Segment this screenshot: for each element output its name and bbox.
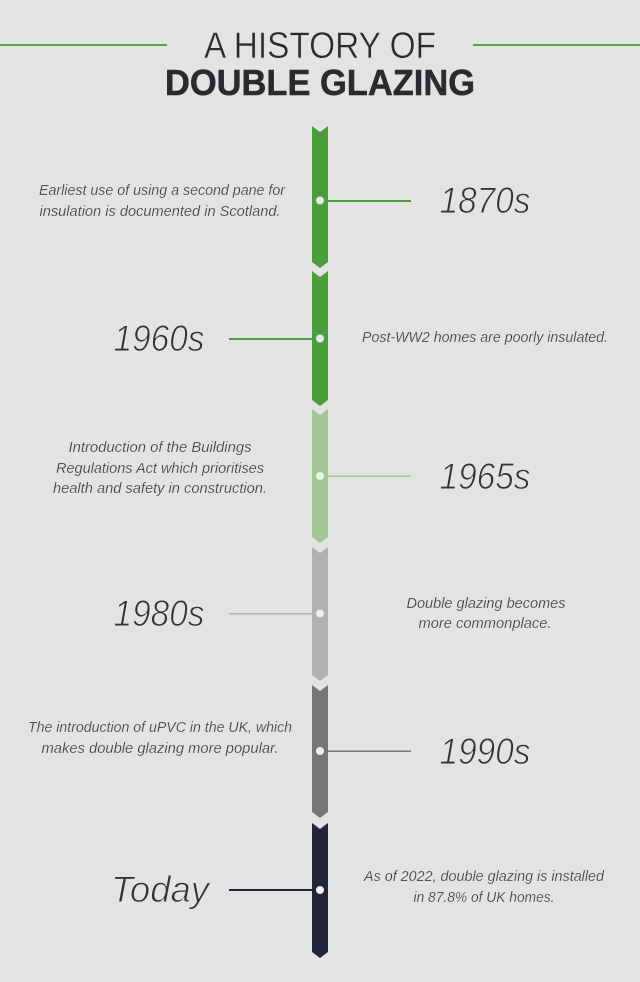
year 1965s: 1965s [440, 456, 530, 497]
description 1990s [28, 720, 292, 757]
year today: Today [111, 869, 211, 910]
segment 1960s [229, 271, 328, 406]
description 1980s: Double glazing becomes [406, 596, 566, 612]
timeline [229, 126, 411, 958]
title line 2: DOUBLE GLAZING [165, 62, 475, 103]
description 1980s: more commonplace. [418, 616, 552, 632]
year 1960s: 1960s [114, 318, 204, 359]
segment 1990s [312, 685, 411, 818]
segment 1870s [312, 126, 411, 268]
description today: As of 2022, double glazing is installed [363, 869, 605, 885]
description today: in 87.8% of UK homes. [414, 890, 554, 906]
description 1870s: Earliest use of using a second pane for [39, 183, 286, 199]
description 1965s [53, 440, 267, 497]
year 1980s: 1980s [114, 593, 204, 634]
description 1990s: The introduction of uPVC in the UK, which [28, 720, 292, 736]
left title rule [0, 44, 167, 46]
description 1965s: health and safety in construction. [53, 481, 267, 497]
description 1960s: Post-WW2 homes are poorly insulated. [362, 330, 608, 346]
title line 1: A HISTORY OF [204, 25, 436, 66]
description 1990s: makes double glazing more popular. [42, 741, 278, 757]
description 1965s: Introduction of the Buildings [68, 440, 252, 456]
right title rule [473, 44, 640, 46]
description today [363, 869, 605, 906]
description 1980s [406, 596, 566, 632]
description 1870s: insulation is documented in Scotland. [40, 204, 280, 220]
segment 1965s [312, 409, 411, 543]
segment 1980s [229, 547, 328, 681]
year 1990s: 1990s [440, 731, 530, 772]
title [165, 25, 475, 103]
segment today [229, 823, 328, 958]
description 1965s: Regulations Act which prioritises [56, 461, 264, 477]
description 1870s [39, 183, 286, 220]
year 1870s: 1870s [440, 180, 530, 221]
